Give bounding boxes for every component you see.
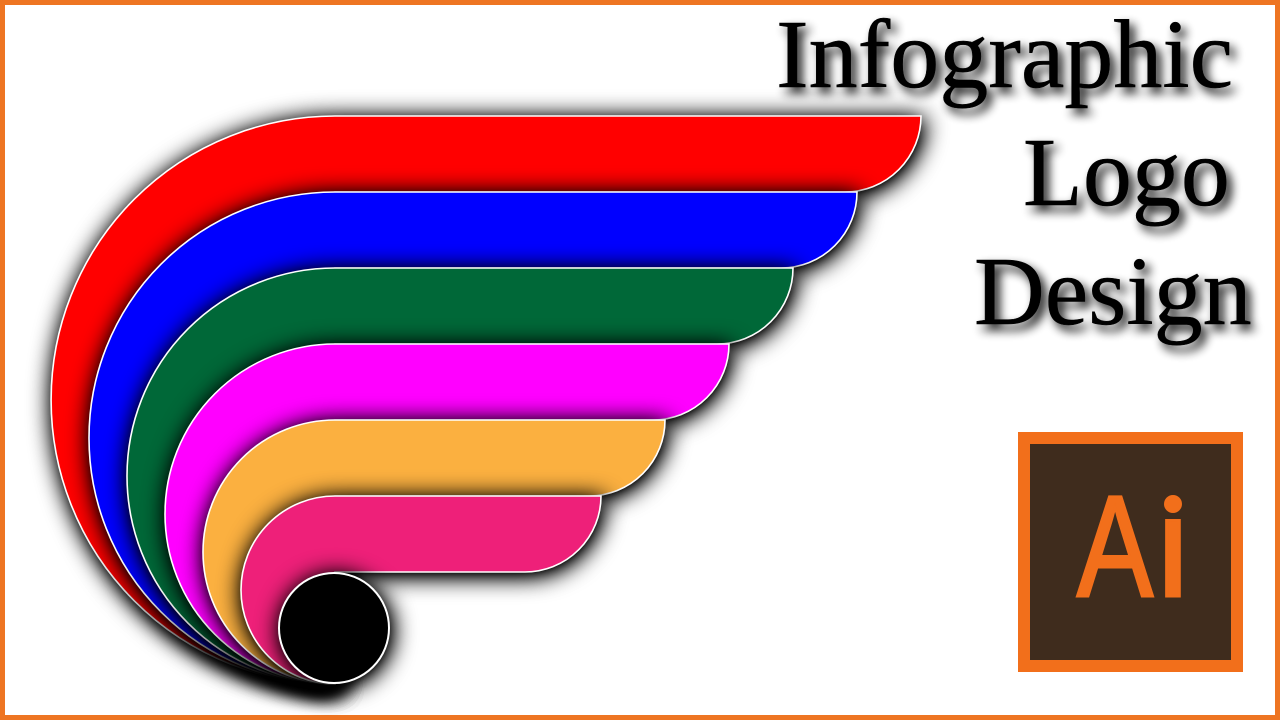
pink band xyxy=(241,496,601,684)
orange band xyxy=(203,420,665,684)
title line: Design: Design xyxy=(974,238,1252,346)
title xyxy=(776,1,1252,346)
title line: Logo: Logo xyxy=(1023,119,1230,227)
icon frame xyxy=(1024,438,1237,666)
wing logo xyxy=(51,116,921,684)
magenta band xyxy=(165,344,729,684)
icon: dot mask xyxy=(1160,482,1190,519)
green band xyxy=(127,268,793,684)
icon letters: i xyxy=(1157,466,1189,627)
red band xyxy=(51,116,921,684)
icon: round i dot xyxy=(1164,495,1182,513)
blue band xyxy=(89,192,857,684)
icon letters: A xyxy=(1077,466,1153,627)
icon: Adobe Illustrator xyxy=(1024,438,1237,666)
title line: Infographic: Infographic xyxy=(776,1,1233,109)
black circle xyxy=(279,573,389,683)
